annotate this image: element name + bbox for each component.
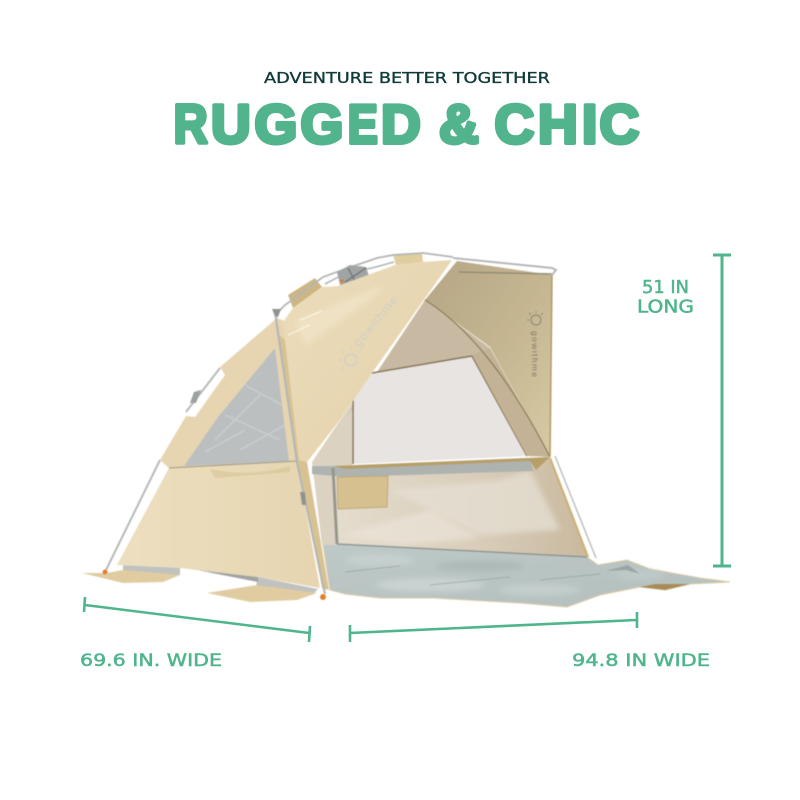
front stake flap xyxy=(207,585,317,602)
side upper panel xyxy=(160,318,307,468)
interior window xyxy=(352,356,527,464)
rear top pole xyxy=(453,258,556,275)
roof strips xyxy=(288,278,322,308)
height label xyxy=(637,278,694,318)
title: rugged and chic: R xyxy=(174,93,208,155)
interior right strip xyxy=(472,348,550,457)
right support pole xyxy=(555,456,596,558)
left width bracket xyxy=(84,597,310,642)
ground sheet xyxy=(323,544,730,607)
front flap logo xyxy=(338,293,401,370)
side lower panel xyxy=(117,462,320,588)
height label: LONG xyxy=(637,298,694,318)
front leg panel xyxy=(279,335,329,590)
title: rugged and chic: & xyxy=(439,93,479,155)
side arc poles xyxy=(106,460,160,570)
height label: 51 IN xyxy=(642,278,689,298)
subtitle: adventure better together: ADVENTURE BETTER TOGETHER xyxy=(264,69,550,87)
title: rugged and chic: I xyxy=(582,93,597,155)
front flap xyxy=(283,260,452,462)
left pole foot xyxy=(102,570,108,574)
title: rugged and chic: C xyxy=(494,93,534,155)
title: rugged and chic: U xyxy=(211,93,251,155)
title: rugged and chic: D xyxy=(381,93,421,155)
left width label: 69.6 IN. WIDE xyxy=(80,651,222,671)
rear panel logo xyxy=(527,311,543,377)
right width bracket xyxy=(350,612,637,642)
rear door panel xyxy=(425,261,552,457)
title: rugged and chic: G xyxy=(254,93,297,155)
right width label: 94.8 IN WIDE xyxy=(572,651,710,671)
left stake flap xyxy=(82,570,180,583)
front pole foot xyxy=(320,594,326,600)
wall pocket xyxy=(337,476,388,509)
interior upper back wall xyxy=(345,300,490,420)
front pole xyxy=(275,312,325,594)
height dimension bracket xyxy=(713,255,731,566)
side mesh window xyxy=(184,348,289,466)
tent illustration xyxy=(82,253,730,607)
title: rugged and chic: C xyxy=(600,93,639,155)
title: rugged and chic: H xyxy=(538,93,578,155)
rear panel logo: gowithme xyxy=(530,331,540,377)
interior lower wall xyxy=(333,458,587,557)
title: rugged and chic: G xyxy=(300,93,343,155)
grey sleeve bar xyxy=(312,461,534,477)
roof hub xyxy=(278,253,453,312)
pole clip xyxy=(190,390,201,403)
ground flaps silver and shadow strip xyxy=(123,564,318,593)
front flap logo: gowithme xyxy=(350,293,401,350)
interior left wall xyxy=(312,403,352,545)
title: rugged and chic: E xyxy=(348,93,378,155)
